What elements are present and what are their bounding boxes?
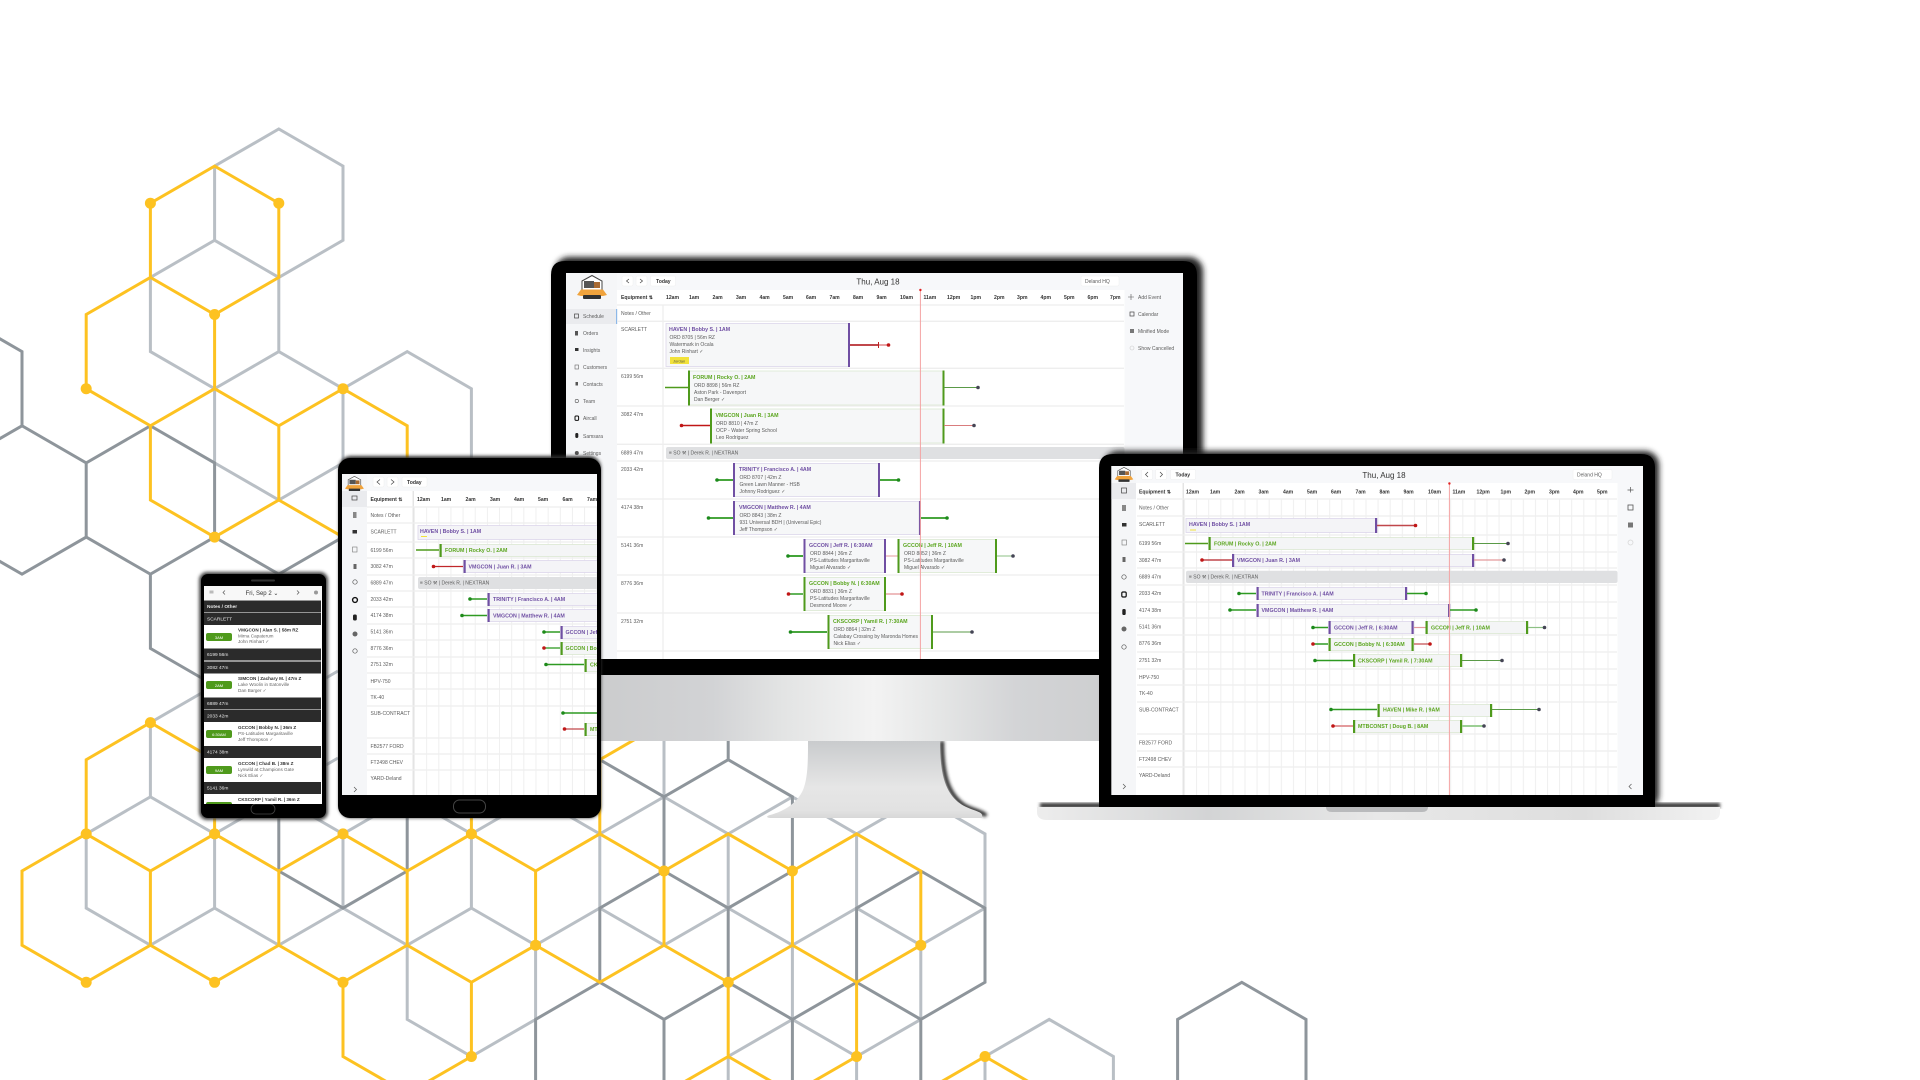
tablet gantt header: 3am <box>490 497 501 503</box>
event: HAVEN Bobby <box>666 323 890 367</box>
event: TRINITY Francisco <box>1237 587 1428 600</box>
monitor gantt header: 5pm <box>1064 295 1075 301</box>
event: GCCON Bobby <box>787 577 904 611</box>
monitor equipment labels: 6199 56m <box>621 374 643 380</box>
event: VMGCON Juan: ORD 8810 | 47m Z <box>716 421 758 427</box>
event: HAVEN Bobby: John Rinhart ✓ <box>670 349 703 355</box>
laptop equipment labels: 4174 38m <box>1139 608 1161 614</box>
background hexagon network <box>0 129 1306 1080</box>
tablet gantt header: 6am <box>562 497 573 503</box>
tablet equipment labels: 2751 32m <box>370 662 393 668</box>
event: TRINITY Francisco: TRINITY | Francisco A. | 4AM <box>493 597 566 603</box>
tablet equipment labels: HPV-750 <box>370 679 391 685</box>
event: VMGCON Juan <box>1200 554 1506 567</box>
monitor sidebar: Samsara <box>583 434 603 440</box>
monitor sidebar: Settings <box>583 451 602 457</box>
event: FORUM Rocky: Aston Park - Davenport <box>694 390 747 396</box>
event: FORUM Rocky <box>1185 537 1510 550</box>
tablet gantt header: 4am <box>514 497 525 503</box>
phone job details: Lake Woolin in Eatonville <box>238 682 290 687</box>
laptop equipment labels: 2033 42m <box>1139 591 1161 597</box>
event: GCCON Bobby: GCCON | Bobby N. | 6:30AM <box>566 646 637 652</box>
tablet equipment labels: 3082 47m <box>370 564 393 570</box>
laptop equipment labels: 8776 36m <box>1139 641 1161 647</box>
event: GCCON Jeff 6:30: GCCON | Jeff R. | 6:30AM <box>809 543 873 549</box>
monitor equipment labels: 6889 47m <box>621 450 643 456</box>
monitor gantt header: 1pm <box>970 295 981 301</box>
tablet equipment labels: TK-40 <box>370 695 384 701</box>
phone job details <box>238 628 302 802</box>
monitor screen <box>566 273 1183 659</box>
monitor sidebar: Contacts <box>583 382 603 388</box>
event: HAVEN Bobby: HAVEN | Bobby S. | 1AM <box>1189 522 1251 528</box>
event: GCCON Jeff 10: GCCON | Jeff R. | 10AM <box>903 543 962 549</box>
event: CKSCORP: CKSCORP | Yamil R. <box>590 662 642 668</box>
phone job details: Dan Barger ✓ <box>238 688 267 693</box>
laptop gantt header: 4am <box>1283 490 1294 496</box>
event: MTBCONST <box>562 723 597 736</box>
event: FORUM Rocky: FORUM | Rocky O. | 2AM <box>693 375 756 381</box>
event: GCCON Jeff 6:30: GCCON | Jeff R. | 6:30AM <box>1334 626 1398 632</box>
tablet screen <box>342 474 597 795</box>
event: CKSCORP Yamil <box>789 615 974 649</box>
event: HAVEN Bobby <box>418 526 600 540</box>
tablet bezel <box>338 458 601 818</box>
phone bezel <box>201 574 326 818</box>
monitor sidebar: Schedule <box>583 314 604 320</box>
laptop gantt header: Equipment ⇅ <box>1139 488 1172 496</box>
laptop equipment labels: SUB-CONTRACT <box>1139 708 1179 714</box>
event: CKSCORP Yamil: Calabay Crossing by Maronda Homes <box>834 634 918 640</box>
monitor shadow <box>555 257 1203 675</box>
event: VMGCON Juan: VMGCON | Juan R. | 3AM <box>1237 558 1301 564</box>
phone job details: Nick Elias ✓ <box>238 773 263 778</box>
event: 6889 band: ≡ SO ⚒ | Derek R. | NEXTRAN <box>420 580 490 586</box>
tablet equipment labels: 6889 47m <box>370 580 393 586</box>
laptop equipment labels: SCARLETT <box>1139 522 1165 528</box>
laptop equipment labels: TK-40 <box>1139 691 1153 697</box>
monitor gantt grid <box>617 305 1124 659</box>
event: VMGCON Matthew <box>1228 604 1478 617</box>
monitor gantt header <box>621 294 1121 301</box>
monitor gantt header: 5am <box>783 295 794 301</box>
monitor gantt header: 7pm <box>1110 295 1121 301</box>
phone header: Fri, Sep 2 ⌄ <box>246 591 278 597</box>
laptop equipment labels: 6889 47m <box>1139 574 1161 580</box>
tablet toolbar: Today <box>407 480 422 486</box>
monitor equipment labels: Notes / Other <box>621 311 651 317</box>
monitor equipment labels <box>621 311 651 625</box>
event: MTBCONST: MTBCONST | Doug B. <box>590 727 645 733</box>
event: 6889 band: ≡ SO ⚒ | Derek R. | NEXTRAN <box>1189 574 1259 580</box>
tablet gantt header: 2am <box>466 497 476 503</box>
laptop equipment labels: FT2498 CHEV <box>1139 757 1172 763</box>
tablet gantt header: 7am <box>587 497 598 503</box>
laptop <box>1037 451 1720 820</box>
phone job details: SIMCON | Zachary M. | 47m Z <box>238 676 302 681</box>
laptop bezel <box>1099 454 1655 807</box>
event: GCCON Bobby <box>1311 638 1432 651</box>
phone row labels: 6199 56m <box>207 652 228 658</box>
tablet gantt header <box>370 497 597 502</box>
tablet gantt events <box>416 525 597 736</box>
event: GCCON Jeff 10: Miguel Alvarado ✓ <box>904 565 945 571</box>
laptop equipment labels: HPV-750 <box>1139 675 1159 681</box>
event: VMGCON Matthew: ORD 8843 | 38m Z <box>740 513 781 519</box>
event: HAVEN Bobby: Jordan <box>673 358 685 364</box>
monitor sidebar: Insights <box>583 348 601 354</box>
phone home button <box>251 804 275 814</box>
event: GCCON Jeff 10 <box>898 539 1015 573</box>
monitor gantt events <box>665 323 1124 649</box>
phone row labels: 2033 42m <box>207 714 228 720</box>
event: 6889 band <box>666 447 1124 459</box>
event: GCCON Bobby: GCCON | Bobby N. | 6:30AM <box>809 581 880 587</box>
laptop toolbar <box>1142 470 1612 480</box>
laptop logo <box>1115 467 1133 482</box>
tablet equipment labels: 4174 38m <box>370 613 393 619</box>
event: HAVEN Mike lead line <box>561 711 600 715</box>
tablet shadow <box>339 456 601 818</box>
phone screen <box>204 586 322 810</box>
phone speaker <box>251 580 275 582</box>
tablet equipment labels: 6199 56m <box>370 548 393 554</box>
phone <box>199 572 328 820</box>
monitor right panel: Calendar <box>1138 312 1159 318</box>
tablet gantt header: Equipment ⇅ <box>370 496 403 503</box>
laptop gantt header: 7am <box>1356 490 1366 496</box>
laptop base <box>1037 807 1720 820</box>
laptop equipment labels <box>1139 506 1179 779</box>
phone dark rows <box>204 600 321 794</box>
phone job details: CKSCORP | Yamil R. | 36m Z <box>238 797 300 802</box>
monitor right panel: Minified Mode <box>1138 329 1169 335</box>
event: TRINITY Francisco: Johnny Rodriguez ✓ <box>740 489 785 495</box>
monitor gantt header: 3am <box>736 295 747 301</box>
phone green time badges <box>206 633 232 810</box>
event: VMGCON Matthew: VMGCON | Matthew R. | 4AM <box>739 505 811 511</box>
monitor gantt header: 8am <box>853 295 864 301</box>
event: GCCON Jeff 6:30: PS-Latitudes Margaritaville <box>810 558 870 564</box>
event: TRINITY Francisco: TRINITY | Francisco A. | 4AM <box>739 467 812 473</box>
laptop current time line <box>1448 482 1451 795</box>
event: VMGCON Juan: OCP - Water Spring School <box>716 428 777 434</box>
laptop gantt header: 5pm <box>1597 490 1608 496</box>
tablet gantt header: 1am <box>441 497 452 503</box>
laptop gantt header: 10am <box>1428 490 1441 496</box>
phone green time badges: 2AM <box>215 683 223 688</box>
monitor right panel <box>1128 294 1174 352</box>
monitor gantt header: 3pm <box>1017 295 1028 301</box>
laptop gantt header: 9am <box>1404 490 1414 496</box>
monitor gantt header: 2am <box>712 295 723 301</box>
event: MTBCONST Doug: MTBCONST | Doug B. | 8AM <box>1358 724 1429 730</box>
tablet logo <box>345 476 364 491</box>
tablet equipment labels: SUB-CONTRACT <box>370 711 410 717</box>
event: VMGCON Juan <box>680 408 976 444</box>
phone row labels: 4174 38m <box>207 750 228 756</box>
monitor gantt header: 6pm <box>1088 295 1098 301</box>
event: VMGCON Juan: VMGCON | Juan R. | 3AM <box>716 413 779 419</box>
event: 6889 band <box>418 577 600 589</box>
phone row labels: 3082 47m <box>207 665 228 671</box>
phone job details: GCCON | Chad B. | 38m Z <box>238 761 294 766</box>
event: 6889 band <box>1186 571 1618 583</box>
laptop gantt header: 1am <box>1210 490 1221 496</box>
monitor gantt header: 4am <box>760 295 770 301</box>
monitor sidebar <box>566 309 617 457</box>
event: CKSCORP Yamil: Nick Elias ✓ <box>834 641 861 647</box>
phone job details: PS-Latitudes Margaritaville <box>238 731 293 736</box>
phone row labels <box>207 604 237 792</box>
phone row labels: Notes / Other <box>207 604 237 610</box>
phone row labels: 5141 36m <box>207 786 228 792</box>
event: GCCON Jeff 6:30: Miguel Alvarado ✓ <box>810 565 851 571</box>
monitor bezel <box>551 261 1197 675</box>
event: GCCON Jeff 10: GCCON | Jeff R. | 10AM <box>1431 626 1490 632</box>
monitor sidebar: Team <box>583 399 595 405</box>
laptop screen <box>1111 466 1643 795</box>
monitor equipment labels: 2033 42m <box>621 467 643 473</box>
yellow node dots <box>81 198 990 1062</box>
event: VMGCON Matthew <box>707 501 949 535</box>
event: FORUM Rocky <box>665 370 980 406</box>
event: FORUM Rocky: ORD 8898 | 56m RZ <box>694 383 739 389</box>
laptop toolbar: Thu, Aug 18 <box>1362 471 1406 480</box>
tablet equipment labels: 2033 42m <box>370 597 393 603</box>
laptop equipment labels: 3082 47m <box>1139 558 1161 564</box>
monitor equipment labels: 8776 36m <box>621 581 643 587</box>
monitor current time line <box>919 289 922 659</box>
tablet equipment labels: SCARLETT <box>370 530 397 536</box>
phone row labels: 6889 47m <box>207 701 228 707</box>
tablet gantt header: 5am <box>538 497 549 503</box>
tablet equipment labels <box>370 513 410 782</box>
event: CKSCORP Yamil: CKSCORP | Yamil R. | 7:30AM <box>1358 658 1433 664</box>
laptop gantt header: 11am <box>1452 490 1466 496</box>
dark grey hexagon lines <box>0 314 1306 1080</box>
phone job details: John Rinhart ✓ <box>238 639 269 644</box>
event: HAVEN Bobby: HAVEN | Bobby S. | 1AM <box>420 529 482 535</box>
monitor gantt header: 9am <box>876 295 887 301</box>
laptop gantt header <box>1139 488 1608 496</box>
monitor gantt header: 11am <box>924 295 937 301</box>
monitor equipment labels: SCARLETT <box>621 327 647 333</box>
laptop equipment labels: 5141 36m <box>1139 624 1161 630</box>
monitor gantt header: 12am <box>666 295 679 301</box>
desktop monitor <box>551 257 1203 818</box>
laptop gantt header: 6am <box>1331 490 1342 496</box>
laptop gantt header: 12am <box>1186 490 1199 496</box>
event: FORUM Rocky: FORUM | Rocky O. | 2AM <box>1214 542 1277 548</box>
event: TRINITY Francisco: ORD 8707 | 42m Z <box>740 475 781 481</box>
monitor gantt header: 7am <box>830 295 840 301</box>
event: HAVEN Bobby: Watermark in Ocala <box>670 342 714 348</box>
monitor sidebar: Customers <box>583 365 608 371</box>
monitor gantt header: 4pm <box>1040 295 1051 301</box>
laptop gantt header: 3am <box>1258 490 1269 496</box>
laptop equipment labels: FB2577 FORD <box>1139 740 1172 746</box>
event: GCCON Bobby: ORD 8831 | 36m Z <box>810 589 852 595</box>
tablet sidebar icons <box>342 491 367 792</box>
laptop gantt header: 5am <box>1307 490 1318 496</box>
event: TRINITY Francisco <box>468 593 600 606</box>
laptop right icons <box>1628 487 1634 789</box>
laptop equipment labels: 2751 32m <box>1139 658 1161 664</box>
monitor gantt header: 2pm <box>994 295 1005 301</box>
event: TRINITY Francisco <box>715 463 900 497</box>
event: CKSCORP <box>544 659 597 672</box>
laptop toolbar: Deland HQ <box>1577 472 1602 478</box>
small hexagon line segments between phone and tablet <box>326 671 338 765</box>
event: GCCON Bobby: GCCON | Bobby N. | 6:30AM <box>1334 642 1405 648</box>
monitor gantt header: 1am <box>689 295 700 301</box>
event: VMGCON Matthew <box>460 609 600 622</box>
event: VMGCON Juan: Leo Rodriguez <box>716 435 749 441</box>
monitor sidebar: Aircall <box>583 416 597 422</box>
event: GCCON Jeff 10: ORD 8852 | 36m Z <box>904 551 946 557</box>
monitor equipment labels: 2751 32m <box>621 619 643 625</box>
event: GCCON Bobby: Desmond Moore ✓ <box>810 603 853 609</box>
tablet row lines <box>367 507 597 770</box>
phone job details: Lynwild at Champions Gate <box>238 767 294 772</box>
event: TRINITY Francisco: TRINITY | Francisco A. | 4AM <box>1262 592 1334 598</box>
phone job details: GCCON | Bobby N. | 36m Z <box>238 725 296 730</box>
event: HAVEN Mike: HAVEN | Mike R. | 9AM <box>1383 708 1440 714</box>
laptop gantt header: 2am <box>1234 490 1245 496</box>
laptop gantt header: 3pm <box>1549 490 1560 496</box>
tablet gantt header: 12am <box>417 497 430 503</box>
event: FORUM Rocky <box>416 544 600 557</box>
event: HAVEN Bobby: ORD 8705 | 56m RZ <box>670 335 715 341</box>
phone green time badges: 9AM <box>215 768 223 773</box>
yellow hexagon lines <box>22 166 1049 1080</box>
event: TRINITY Francisco: Green Lawn Manner - HSB <box>740 482 800 488</box>
monitor right panel: Show Cancelled <box>1138 346 1174 352</box>
monitor toolbar: Thu, Aug 18 <box>856 278 900 286</box>
event: FORUM Rocky: Dan Berger ✓ <box>694 397 725 403</box>
monitor chin <box>551 675 1197 741</box>
event: HAVEN Bobby <box>1186 518 1417 533</box>
monitor stand <box>767 741 986 818</box>
laptop equipment labels: 6199 56m <box>1139 541 1161 547</box>
event: GCCON Jeff: GCCON | Jeff R. | 6:30AM <box>566 630 630 636</box>
monitor gantt header: Equipment ⇅ <box>621 294 654 301</box>
event: VMGCON Juan: VMGCON | Juan R. | 3AM <box>468 564 532 570</box>
laptop shadow <box>1040 451 1720 809</box>
event: CKSCORP Yamil: ORD 8864 | 32m Z <box>834 627 875 633</box>
event: MTBCONST Doug <box>1331 720 1486 733</box>
monitor toolbar <box>622 276 1119 286</box>
event: VMGCON Matthew: VMGCON | Matthew R. | 4AM <box>1262 608 1334 614</box>
tablet <box>336 453 604 821</box>
event: HAVEN Mike <box>1329 704 1541 717</box>
event: GCCON Jeff <box>542 626 597 639</box>
event: 6889 band: ≡ SO ⚒ | Derek R. | NEXTRAN <box>669 450 739 456</box>
event: VMGCON Juan <box>432 560 600 573</box>
tablet equipment labels: Notes / Other <box>370 513 401 519</box>
monitor equipment labels: 5141 36m <box>621 543 643 549</box>
monitor gantt header: 6am <box>806 295 817 301</box>
laptop gantt header: 1pm <box>1500 490 1511 496</box>
event: CKSCORP Yamil <box>1313 654 1504 667</box>
laptop gantt events <box>1185 518 1618 733</box>
tablet home button <box>454 800 486 813</box>
monitor toolbar: Deland HQ <box>1085 279 1110 285</box>
event: VMGCON Matthew: Jeff Thompson ✓ <box>740 527 778 533</box>
event: FORUM Rocky: FORUM | Rocky O. | 2AM <box>445 548 508 554</box>
laptop gantt header: 12pm <box>1476 490 1490 496</box>
laptop toolbar: Today <box>1176 472 1190 478</box>
phone green time badges: 3AM <box>215 635 223 640</box>
tablet equipment labels: YARD-Deland <box>370 776 402 782</box>
monitor gantt header: 12pm <box>947 295 961 301</box>
monitor sidebar: Orders <box>583 331 599 337</box>
tablet equipment labels: FT2498 CHEV <box>370 760 404 766</box>
phone job details: Mirna Capaterum <box>238 634 274 638</box>
laptop row lines <box>1137 499 1617 767</box>
laptop equipment labels: Notes / Other <box>1139 506 1169 512</box>
monitor logo <box>577 276 607 299</box>
event: GCCON Jeff 10 <box>1426 621 1546 634</box>
event: CKSCORP Yamil: CKSCORP | Yamil R. | 7:30AM <box>833 619 908 625</box>
phone job details: Jeff Thompson ✓ <box>238 737 273 742</box>
event: GCCON Bobby: PS-Latitudes Margaritaville <box>810 596 870 602</box>
event: VMGCON Matthew: VMGCON | Matthew R. | 4AM <box>493 614 565 620</box>
laptop gantt header: 8am <box>1380 490 1390 496</box>
tablet equipment labels: FB2577 FORD <box>370 744 404 750</box>
laptop gantt header: 2pm <box>1524 490 1535 496</box>
phone job details: VMGCON | Alan S. | 58m RZ <box>238 628 299 632</box>
event: GCCON Jeff 6:30: ORD 8844 | 36m Z <box>810 551 852 557</box>
tablet toolbar <box>373 477 427 487</box>
event: GCCON Jeff 6:30 <box>786 539 898 573</box>
light grey hexagon lines <box>86 129 1113 1080</box>
phone green time badges: 6:30AM <box>212 732 226 737</box>
event: HAVEN Bobby: HAVEN | Bobby S. | 1AM <box>669 327 731 333</box>
tablet equipment labels: 5141 36m <box>370 630 393 636</box>
laptop gantt header: 4pm <box>1573 490 1584 496</box>
phone row labels: SCARLETT <box>207 616 232 622</box>
monitor toolbar: Today <box>656 279 671 285</box>
monitor gantt header: 10am <box>900 295 913 301</box>
laptop equipment labels: YARD-Deland <box>1139 773 1170 779</box>
laptop sidebar icons <box>1111 483 1136 789</box>
phone header <box>210 590 318 596</box>
monitor equipment labels: 4174 38m <box>621 505 643 511</box>
event: GCCON Bobby <box>542 642 597 655</box>
event: VMGCON Matthew: 931 Universal BDH | (Universal Epic) <box>740 520 822 526</box>
phone shadow <box>199 572 328 820</box>
monitor equipment labels: 3082 47m <box>621 412 643 418</box>
event: GCCON Jeff 6:30 <box>1311 621 1426 634</box>
monitor right panel: Add Event <box>1138 295 1162 301</box>
tablet equipment labels: 8776 36m <box>370 646 393 652</box>
event: GCCON Jeff 10: PS-Latitudes Margaritaville <box>904 558 964 564</box>
